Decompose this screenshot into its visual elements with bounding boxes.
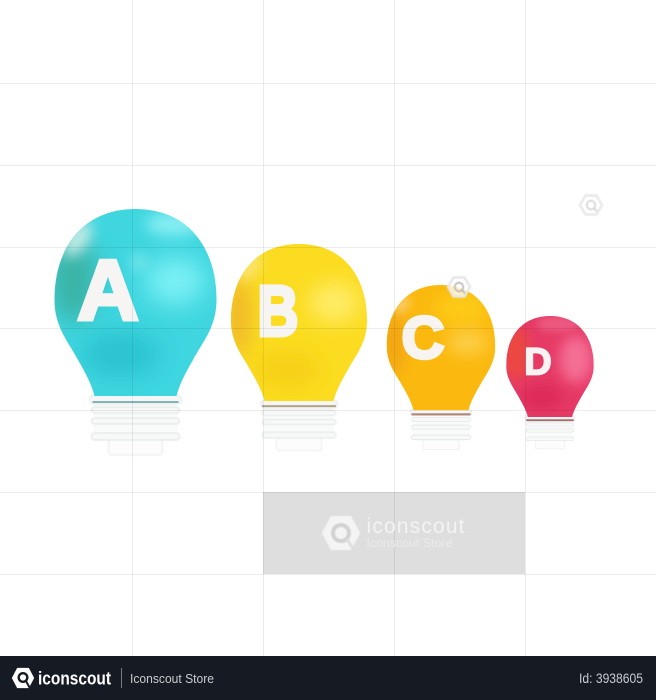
- bulb A: [54, 209, 216, 456]
- letter B: B: [258, 271, 299, 351]
- bulb B: [231, 244, 367, 451]
- watermark logo: [323, 517, 359, 549]
- footer id: Id: 3938605: [579, 671, 643, 686]
- small watermark icon centre: [448, 278, 470, 296]
- bulb B screw base: [260, 400, 338, 451]
- footer logo icon: [12, 668, 34, 688]
- small watermark icon right: [580, 196, 602, 214]
- footer store name: Iconscout Store: [130, 671, 214, 686]
- bulb A glass: [54, 209, 216, 396]
- bulb A screw base: [90, 395, 182, 455]
- bulb C screw base: [410, 410, 472, 450]
- bulb D screw base: [525, 416, 575, 449]
- watermark store text: Iconscout Store: [366, 536, 453, 550]
- watermark panel: [263, 492, 525, 574]
- footer divider: [121, 668, 122, 688]
- bulb C glass: [386, 285, 496, 410]
- footer bar: [0, 656, 656, 700]
- watermark brand text: iconscout: [366, 515, 465, 538]
- letter A: A: [77, 244, 139, 338]
- bulb D: [506, 316, 594, 449]
- letter C: C: [402, 305, 444, 371]
- letter D: D: [524, 342, 552, 384]
- bulb B glass: [231, 244, 367, 402]
- bulb D glass: [506, 316, 594, 417]
- footer brand: iconscout: [38, 668, 111, 688]
- bulb C: [386, 285, 496, 450]
